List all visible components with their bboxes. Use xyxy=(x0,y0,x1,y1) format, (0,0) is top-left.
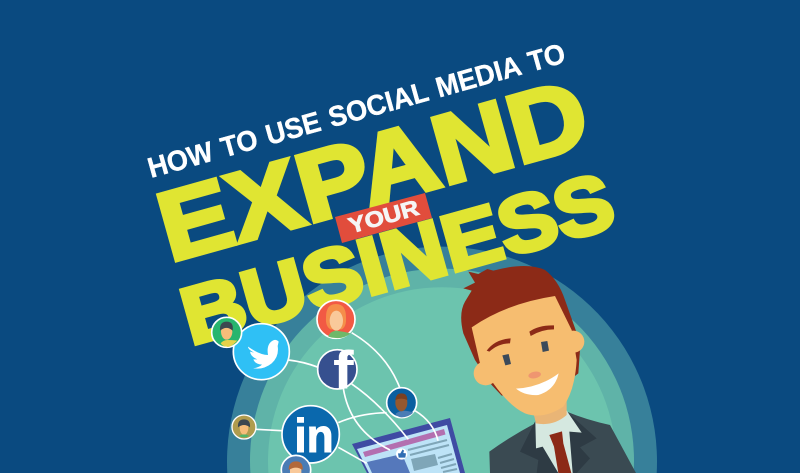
network lines xyxy=(256,333,438,463)
lapels xyxy=(520,412,597,473)
badge: your: YOUR xyxy=(346,195,422,238)
title word: expand: EXPAND xyxy=(146,58,599,282)
pink header bar xyxy=(363,429,446,457)
icon: twitter xyxy=(233,324,289,380)
face xyxy=(472,296,584,416)
icon: linkedin: in xyxy=(294,410,334,463)
avatar: olive man xyxy=(232,415,256,439)
laptop screen xyxy=(352,418,465,473)
hair xyxy=(461,266,580,396)
icon: linkedin xyxy=(282,406,339,463)
avatar: red-haired woman xyxy=(317,300,355,338)
tie xyxy=(549,431,571,473)
man illustration xyxy=(461,266,636,473)
smile xyxy=(516,373,559,395)
concentric circle backdrop xyxy=(227,247,657,473)
icon: like badge xyxy=(396,448,407,460)
social network diagram xyxy=(212,300,438,473)
title word: business: BUSINESS xyxy=(172,156,623,361)
eyes xyxy=(502,354,511,365)
avatar: bottom man xyxy=(281,455,311,473)
avatar: dark man xyxy=(387,388,417,418)
avatar: green woman xyxy=(212,317,242,347)
icon: facebook xyxy=(318,342,357,401)
article image xyxy=(411,454,438,471)
blue panel xyxy=(367,454,410,473)
title line: how to use social media to: HOW TO USE SOCIAL MEDIA TO xyxy=(144,38,569,185)
icon: facebook: f xyxy=(333,342,354,401)
suit xyxy=(489,412,636,473)
nose xyxy=(528,371,541,379)
article lines xyxy=(408,440,457,472)
neck xyxy=(533,400,567,424)
eyebrows xyxy=(487,338,511,352)
badge: your xyxy=(335,193,432,243)
shirt collar xyxy=(535,411,582,473)
